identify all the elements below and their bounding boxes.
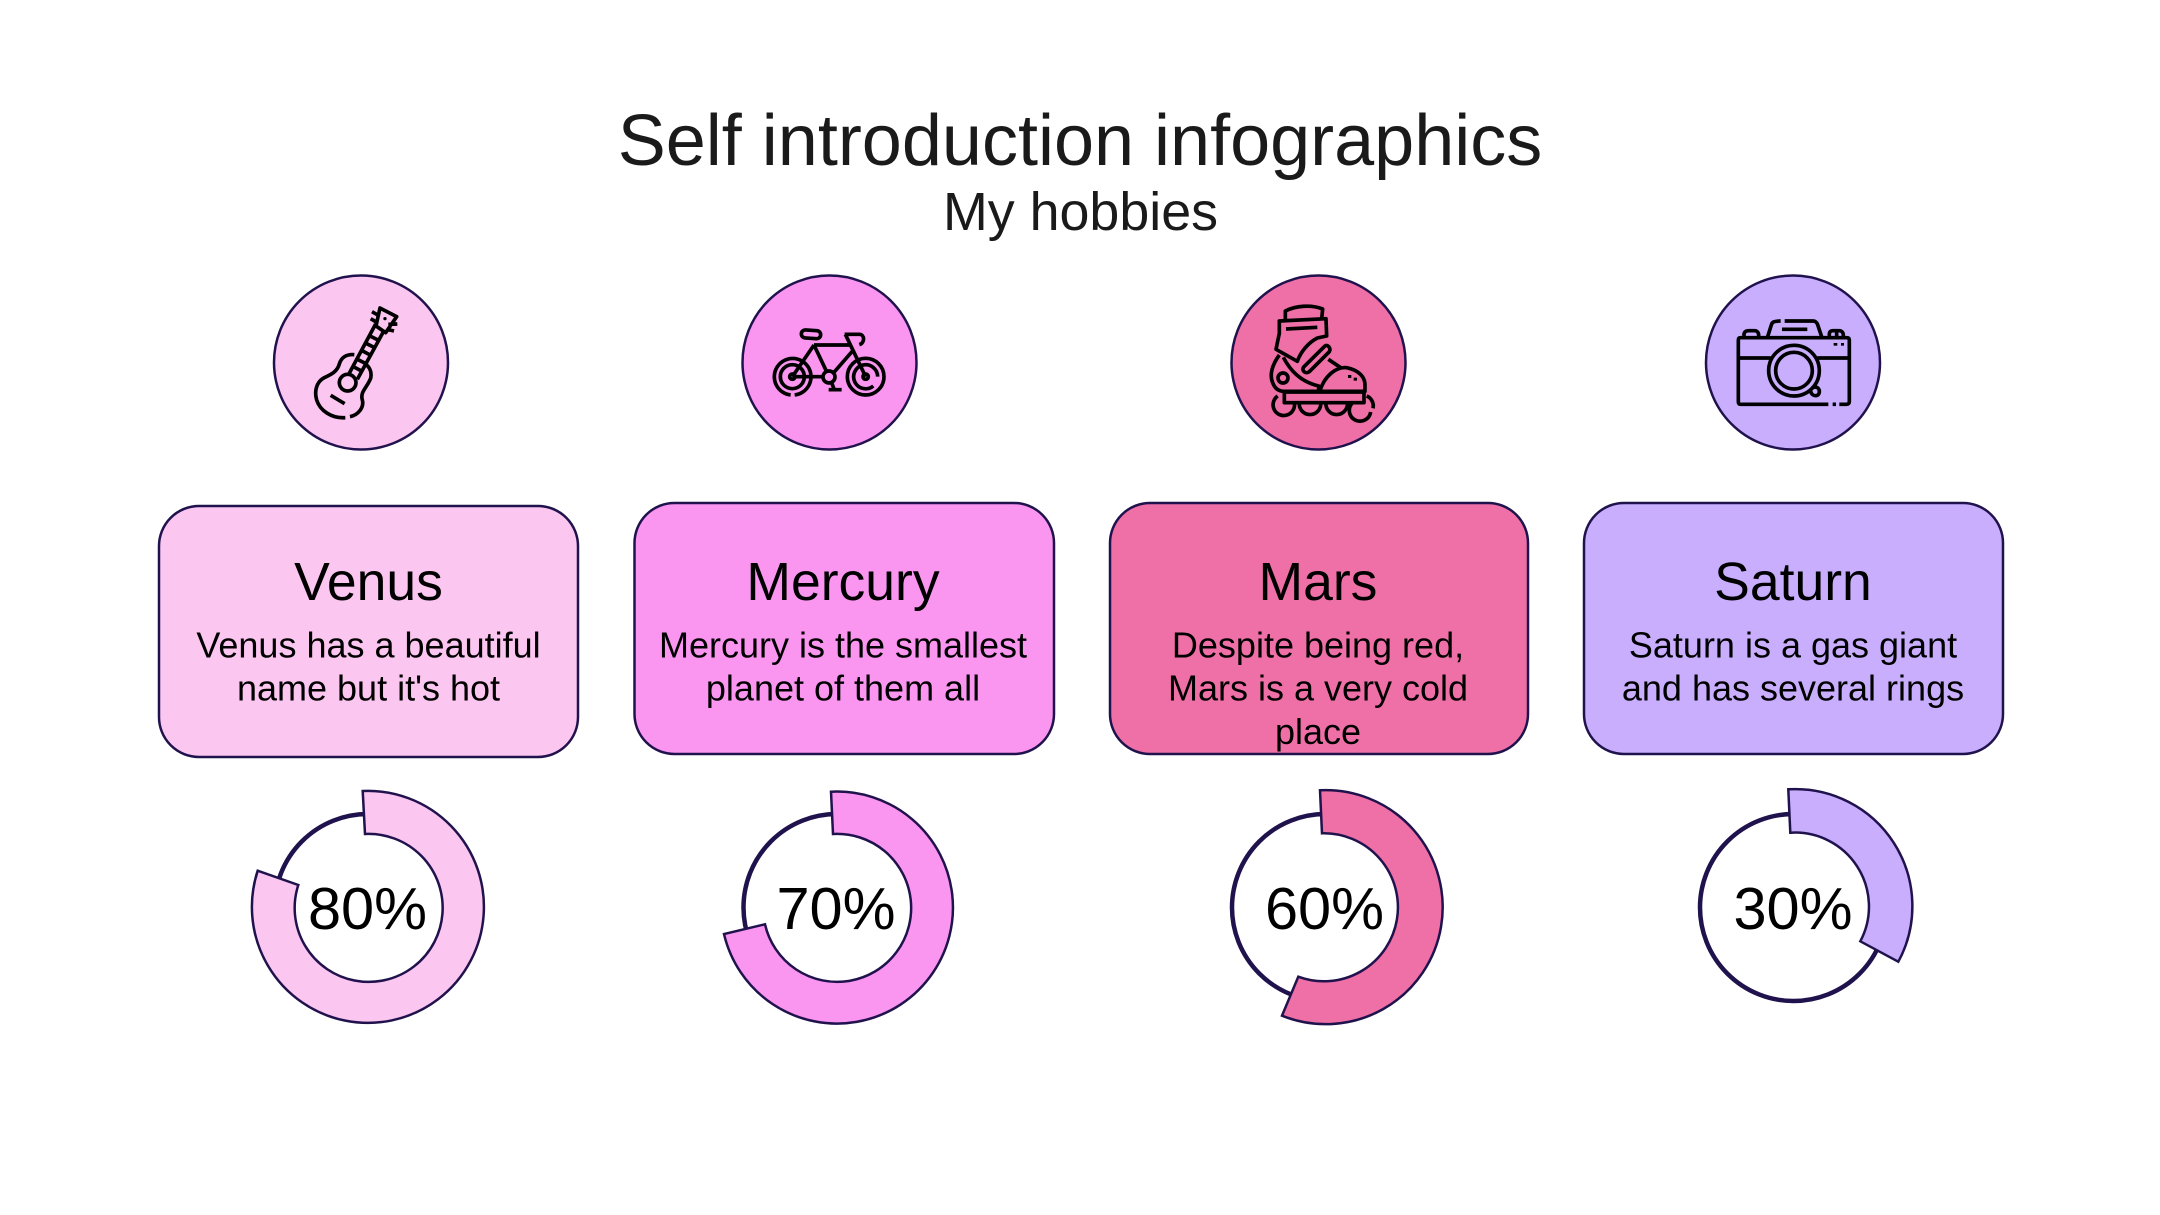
icon: bicycle (742, 276, 916, 450)
donut chart: 80%: 80% (308, 875, 427, 942)
text: Mars description: Despite being red, (1172, 624, 1464, 666)
subtitle: My hobbies (943, 182, 1218, 242)
heading: Venus: Venus (294, 553, 443, 612)
donut chart: 70% (724, 792, 953, 1024)
donut chart: 30% (1700, 789, 1912, 1001)
card: Mercury (634, 503, 1054, 754)
panel: Saturn column (1584, 276, 2003, 1001)
donut chart: 80% (252, 791, 484, 1023)
heading: Mercury: Mercury (746, 553, 940, 612)
donut chart: 60%: 60% (1265, 875, 1384, 942)
panel: Venus column (159, 276, 578, 1023)
panel: Mercury column (634, 276, 1054, 1024)
card: Saturn (1584, 503, 2003, 754)
text: Saturn description: Saturn is a gas giant (1629, 624, 1957, 666)
donut chart: 70%: 70% (776, 875, 896, 942)
card: Venus (159, 506, 578, 757)
icon: inline skate (1232, 276, 1406, 450)
title: Self introduction infographics (618, 101, 1542, 181)
text: Mercury description: planet of them all (706, 668, 980, 708)
donut chart: 60% (1232, 790, 1443, 1024)
heading: Mars: Mars (1259, 553, 1377, 612)
text: Mars description: Mars is a very cold (1168, 668, 1468, 708)
text: Mercury description: Mercury is the smallest (659, 624, 1027, 666)
text: Venus description: Venus has a beautiful (196, 624, 541, 666)
text: Venus description: name but it's hot (237, 668, 500, 708)
icon: guitar (274, 276, 448, 450)
icon: camera (1706, 276, 1880, 450)
card: Mars (1110, 503, 1528, 754)
panel: Mars column (1110, 276, 1528, 1024)
heading: Saturn: Saturn (1714, 553, 1872, 612)
text: Saturn description: and has several rings (1622, 668, 1964, 708)
text: Mars description: place (1275, 711, 1361, 752)
donut chart: 30%: 30% (1733, 875, 1853, 942)
